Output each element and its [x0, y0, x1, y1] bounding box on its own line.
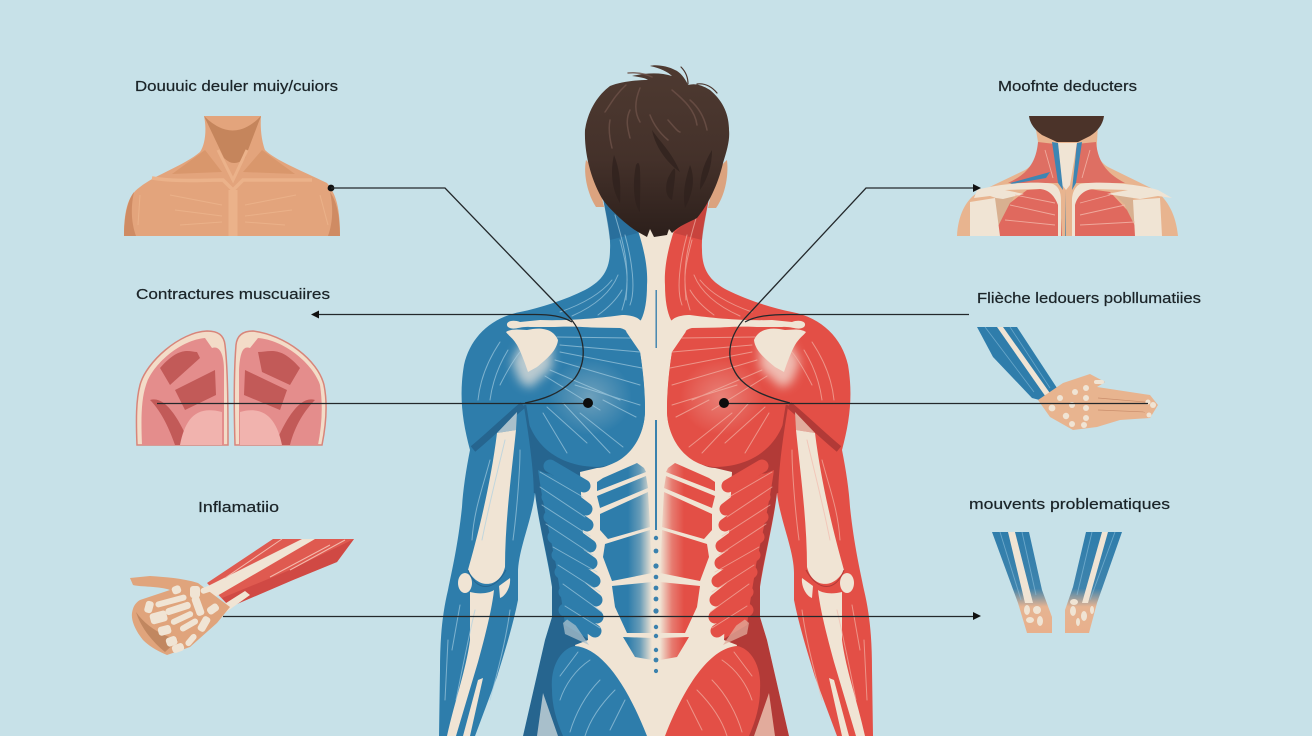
illustration: red forearm and hand [130, 539, 354, 655]
connector: left horizontal to dot [157, 398, 593, 408]
illustration: back neck and shoulders [957, 116, 1178, 236]
central figure: red muscle side [656, 198, 873, 736]
label: bottom right: mouvents problematiques [969, 496, 1170, 513]
ears [585, 160, 727, 208]
connector: top right arrow to chest [730, 184, 981, 403]
spine line and dots [653, 290, 659, 673]
connector: top left dot to chest [328, 185, 583, 403]
illustration: tan chest and neck [124, 116, 340, 236]
label: contractures: Contractures muscuaiires [136, 286, 330, 303]
label: inflammation: Inflamatiio [198, 499, 279, 516]
central figure: blue muscle side [439, 198, 656, 736]
label: top left: Douuuic deuler muiy/cuiors [135, 78, 338, 95]
connector: contractures line, right [745, 314, 969, 322]
illustration: blue forearm and hand [977, 327, 1158, 430]
connector: right horizontal from dot [719, 398, 1148, 408]
connector: bottom arrow across figure [223, 612, 981, 620]
illustration: pair of blue forearms [992, 532, 1122, 633]
illustration: pink muscle pair [136, 331, 326, 445]
label: top right: Moofnte deducters [998, 78, 1137, 95]
label: right middle: Flièche ledouers pobllumatiies [977, 290, 1201, 307]
connector: contractures arrow, left [311, 310, 572, 322]
hair [585, 65, 729, 237]
